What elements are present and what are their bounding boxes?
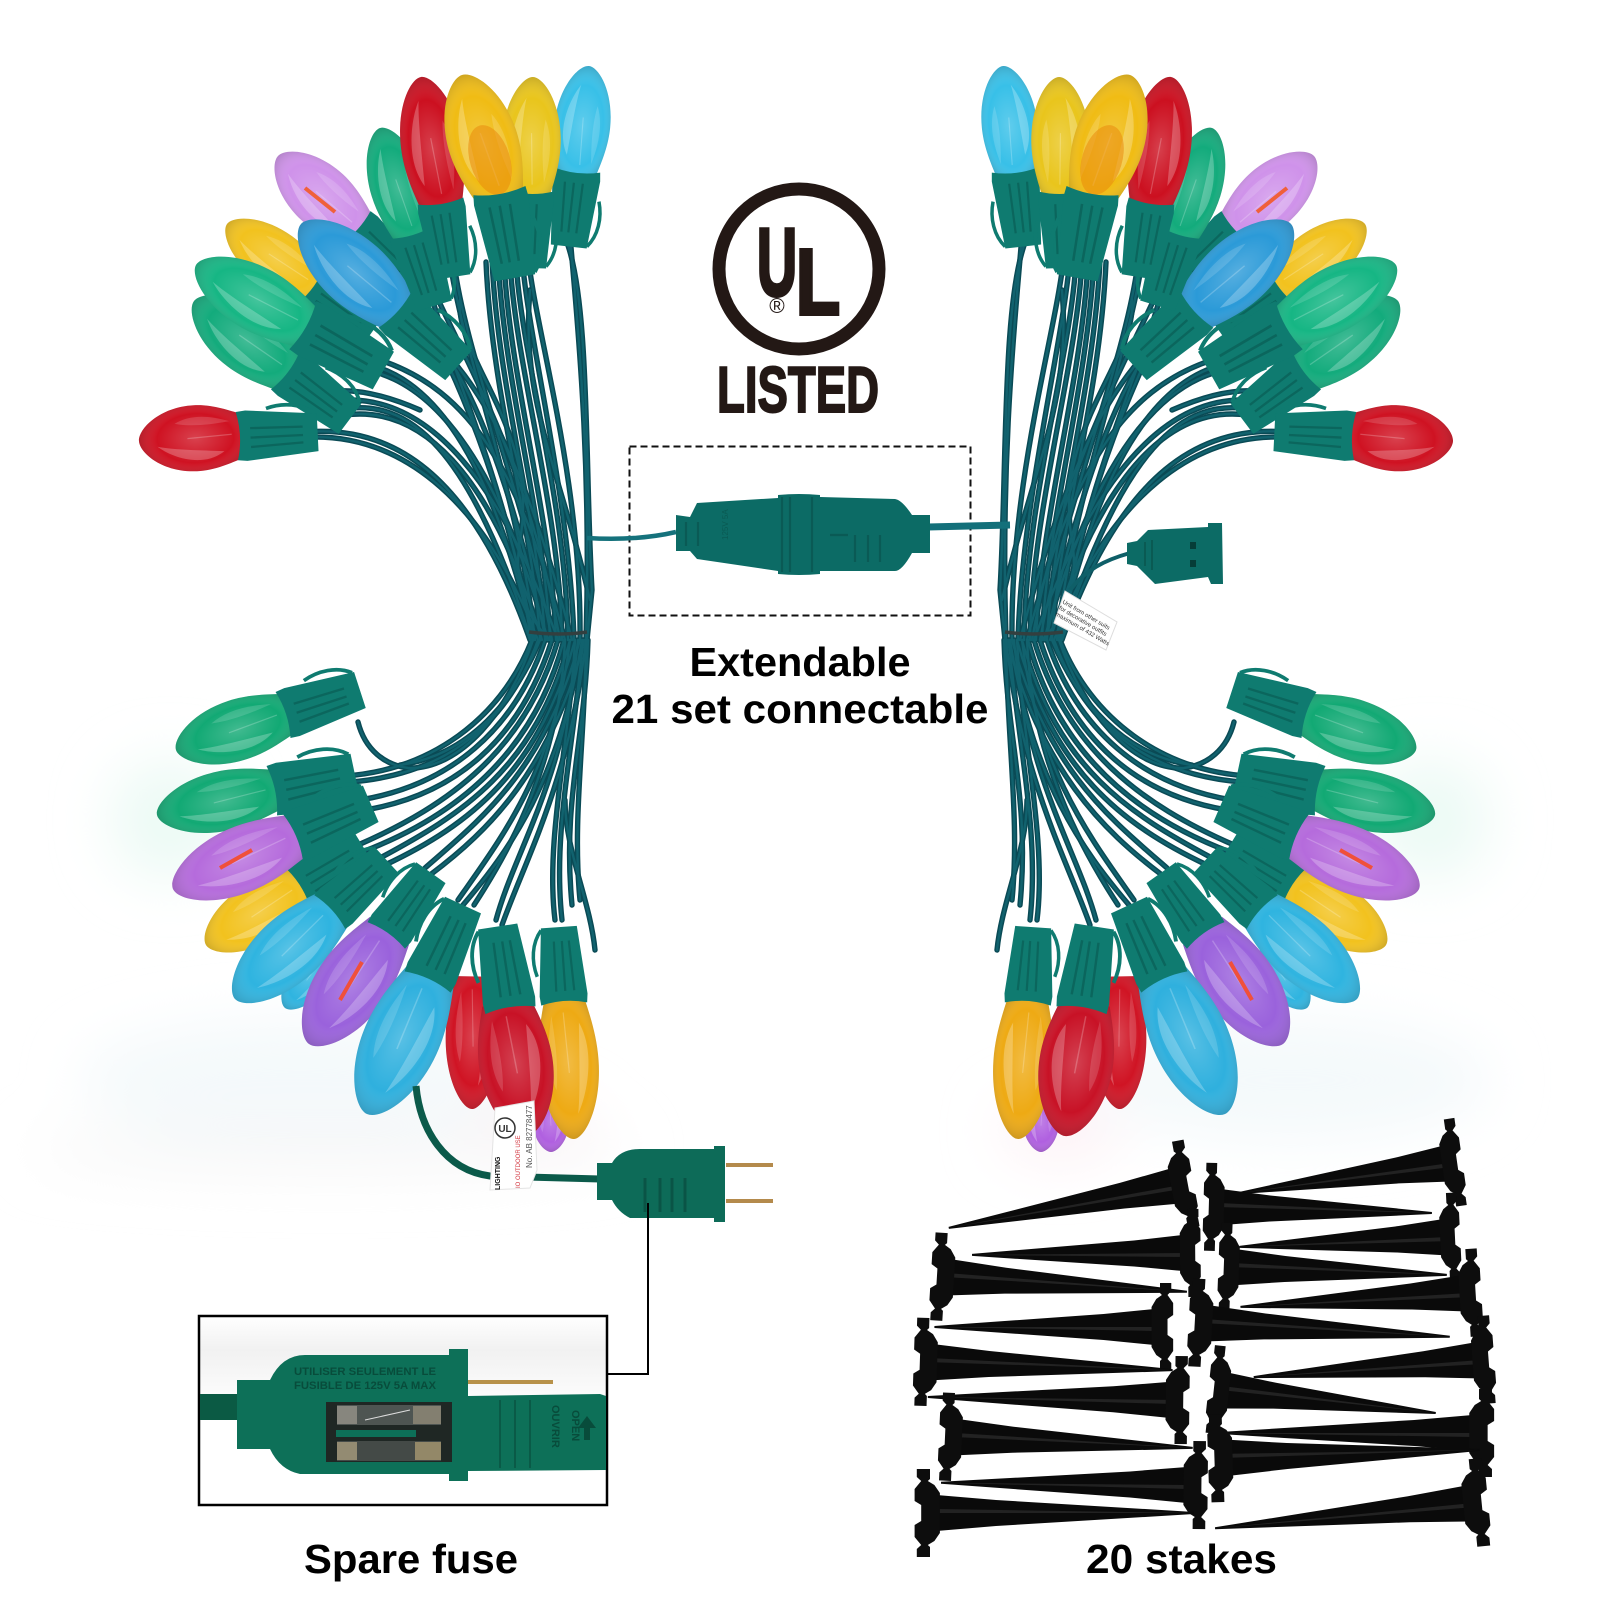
dashed box <box>630 446 970 616</box>
fuses <box>337 1405 441 1461</box>
left half light string <box>137 63 617 1152</box>
bulb: purple <box>257 133 430 298</box>
leader line to inset <box>607 1203 648 1374</box>
panel: spare fuse inset <box>199 1316 607 1505</box>
cable tie <box>529 632 587 634</box>
bulb: green front <box>180 237 400 396</box>
open label: OUVRIR <box>549 1405 561 1448</box>
bulb: blue lower 1 <box>213 840 403 1023</box>
bulb: red behind <box>444 976 502 1109</box>
stake column right <box>1186 1118 1498 1572</box>
fuse window <box>326 1402 452 1462</box>
right wire tag: for decorative outfits <box>1058 606 1107 638</box>
power plug <box>597 1146 773 1222</box>
UL cord label <box>490 1101 537 1190</box>
Extendable caption: 21 set connectable <box>612 686 988 732</box>
UL letters: L <box>796 230 840 334</box>
Extendable caption <box>612 639 988 732</box>
UL letters: U <box>757 209 797 316</box>
connector body <box>676 494 930 575</box>
bulb: red bottom <box>468 923 563 1142</box>
right half light string (mirror) <box>975 63 1455 1152</box>
LISTED: LISTED <box>717 353 879 426</box>
body <box>1127 523 1223 584</box>
open label <box>549 1405 581 1448</box>
bulb: purple lower 1 <box>160 776 381 919</box>
arrow <box>578 1416 596 1440</box>
plug cord <box>416 1086 600 1179</box>
bulb: purple lower 2 <box>280 857 450 1065</box>
UL ring <box>719 189 879 349</box>
open label: OPEN <box>569 1410 581 1441</box>
bulb: blue lower 2 <box>332 892 487 1130</box>
bulb: red side <box>137 403 319 474</box>
bulb: yellow right <box>500 76 562 269</box>
plug body <box>237 1349 468 1481</box>
bulb: blue small <box>269 937 347 1020</box>
right wire tag <box>1054 591 1117 650</box>
wire bundle <box>300 235 595 950</box>
UL cord label: UL <box>498 1124 512 1135</box>
Extendable caption: Extendable <box>690 639 910 685</box>
bulb: yellow lower <box>190 825 377 971</box>
bulb: blue front <box>278 199 479 385</box>
bulb: yellow bottom <box>531 926 604 1141</box>
bulb: amber front <box>429 65 546 283</box>
UL cord label: LIGHTING <box>495 1156 502 1190</box>
right wire tag: maximum of 432 Watts <box>1054 612 1110 647</box>
prongs <box>726 1165 773 1201</box>
stakes <box>912 1118 1498 1572</box>
upper bulb cluster <box>137 63 617 474</box>
inset frame <box>199 1316 607 1505</box>
right wire tag: Unit from other suits <box>1061 600 1110 632</box>
background glow <box>30 760 1490 1172</box>
bulb: green lower 2 <box>151 743 360 844</box>
connector markings: 125V 5A <box>721 509 730 540</box>
connector cords <box>587 532 676 539</box>
embossed text <box>294 1366 437 1392</box>
UL listed logo <box>717 189 879 426</box>
Spare fuse caption: Spare fuse <box>304 1536 518 1582</box>
bulb: light blue <box>545 63 617 250</box>
prong <box>468 1380 553 1384</box>
female end connector <box>1070 523 1223 590</box>
plug body <box>597 1146 725 1222</box>
UL cord label: IO OUTDOOR USE <box>516 1135 522 1188</box>
extension connector <box>587 494 1010 575</box>
plug grooves <box>645 1178 685 1212</box>
bulb: red top <box>390 72 480 281</box>
bulb: green lower 1 <box>167 662 368 779</box>
cord <box>200 1394 238 1420</box>
slots <box>1190 542 1196 567</box>
pull tab <box>468 1394 606 1471</box>
embossed text: UTILISER SEULEMENT LE <box>294 1366 436 1378</box>
UL cord label: No. AB 82778477 <box>525 1105 534 1168</box>
tag UL mark <box>495 1118 515 1138</box>
stake column left <box>912 1139 1208 1557</box>
bulb: green upper <box>353 120 461 313</box>
bulb: yellow <box>211 201 390 349</box>
embossed text: FUSIBLE DE 125V 5A MAX <box>294 1380 437 1392</box>
lower bulb cluster <box>151 662 604 1152</box>
bulb: green back <box>175 275 368 439</box>
bulb: purple small <box>533 1096 569 1152</box>
connector grooves <box>686 497 880 572</box>
wire <box>1070 553 1130 590</box>
20 stakes caption: 20 stakes <box>1086 1536 1277 1582</box>
registered mark: ® <box>769 295 785 318</box>
